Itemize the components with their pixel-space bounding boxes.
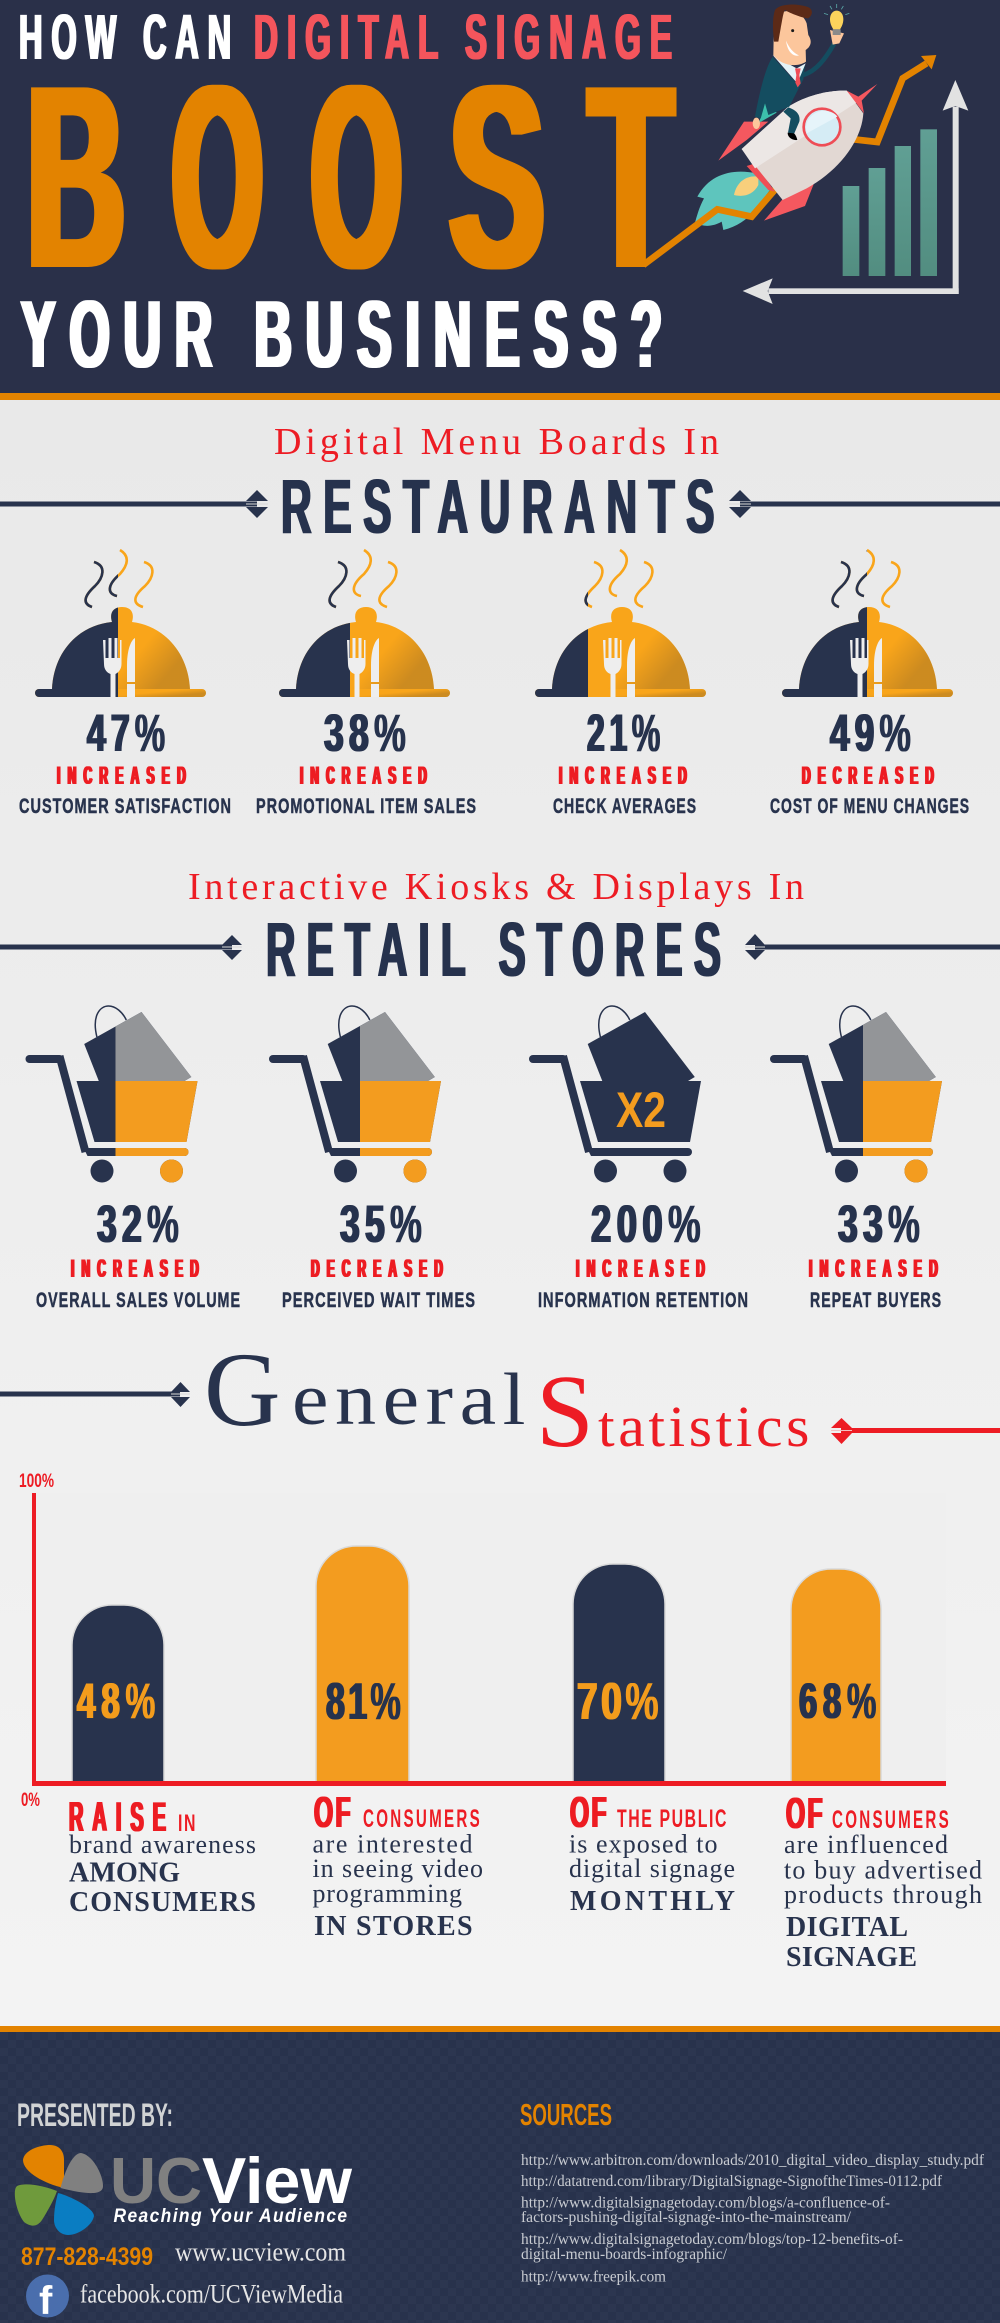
arrow: orange growth line: [643, 55, 936, 265]
heading: general statistics: eneral: [292, 1359, 532, 1441]
phone number: 877-828-4399: [21, 2243, 153, 2271]
icon: shopping cart 33%: [774, 1006, 942, 1182]
title word: boost: T: [589, 32, 673, 323]
icon: cloche 49%: [782, 550, 953, 697]
title word: boost: O: [172, 32, 263, 323]
stat: 21% check averages: INCREASED: [559, 762, 694, 790]
stat: 200% information retention: [533, 1006, 749, 1312]
heading: general statistics: S: [536, 1354, 594, 1469]
bar: 81%: 81%: [326, 1673, 404, 1731]
divider: general right: [831, 1418, 1000, 1444]
stat: 35% perceived wait times: PERCEIVED WAIT TIMES: [282, 1289, 476, 1312]
icon: businessman holding light bulb: [753, 4, 849, 140]
stat: 35% perceived wait times: 35%: [340, 1195, 427, 1254]
stat: 21% check averages: [535, 550, 706, 818]
source list: http://www.arbitron.com/downloads/2010_digital_video_display_study.pdf: [521, 2152, 985, 2169]
logo: ucview: View: [202, 2144, 352, 2217]
caption: of consumers interested in video in stores: IN STORES: [314, 1911, 473, 1942]
caption: raise in brand awareness among consumers: [69, 1793, 256, 1918]
stat: 49% cost of menu changes: [770, 550, 970, 818]
section heading: interactive kiosks and displays in: Interactive Kiosks & Displays In: [188, 866, 804, 908]
stat: 49% cost of menu changes: 49%: [830, 704, 916, 763]
stat: 35% perceived wait times: DECREASED: [311, 1255, 450, 1283]
stat: 32% overall sales volume: OVERALL SALES VOLUME: [36, 1289, 241, 1312]
logo: ucview: Reaching Your Audience: [114, 2206, 348, 2227]
title line: how can digital signage: [19, 1, 681, 73]
caption: raise in brand awareness among consumers: AMONG: [69, 1858, 180, 1888]
stat: 21% check averages: CHECK AVERAGES: [553, 795, 697, 818]
source list: http://www.digitalsignagetoday.com/blogs/a-confluence-of-: [521, 2194, 890, 2211]
divider: general left: [0, 1382, 190, 1407]
icon: cloche 38%: [279, 550, 450, 697]
stat: 200% information retention: INFORMATION RETENTION: [538, 1289, 749, 1312]
caption: of the public exposed monthly: digital signage: [569, 1854, 735, 1883]
divider: retail left: [0, 935, 242, 960]
title word: boost: O: [311, 32, 402, 323]
title word: boost: B: [27, 32, 125, 323]
source list: digital-menu-boards-infographic/: [521, 2246, 728, 2263]
website: www.ucview.com: [175, 2238, 346, 2267]
bar: 70%: [573, 1564, 665, 1782]
stat: 33% repeat buyers: 33%: [838, 1195, 925, 1254]
title word: boost: S: [449, 32, 544, 323]
caption: raise in brand awareness among consumers: IN: [178, 1810, 197, 1837]
bar: 81%: [316, 1546, 409, 1782]
caption: of consumers interested in video in stores: are interested: [312, 1830, 472, 1858]
title word: boost: [27, 32, 673, 323]
icon: cloche 47%: [35, 550, 206, 697]
source list: http://datatrend.com/library/DigitalSignage-SignoftheTimes-0112.pdf: [521, 2173, 943, 2190]
caption: of the public exposed monthly: is exposed to: [569, 1830, 718, 1858]
stat: 21% check averages: 21%: [587, 704, 665, 763]
caption: of consumers influenced by digital signage: SIGNAGE: [786, 1942, 917, 1973]
footer panel: [0, 2026, 1000, 2323]
caption: of consumers influenced by digital signage: are influenced: [784, 1830, 948, 1859]
header panel: [0, 0, 1000, 400]
source list: [521, 2152, 985, 2286]
icon: shopping cart 35%: [273, 1006, 441, 1182]
bar: 48%: [72, 1605, 164, 1782]
divider: restaurants left: [0, 490, 268, 518]
stat: 47% customer satisfaction: INCREASED: [57, 762, 193, 790]
stat: 32% overall sales volume: INCREASED: [71, 1255, 206, 1283]
stat: 200% information retention: INCREASED: [576, 1255, 712, 1283]
icon: rocket: [718, 84, 877, 221]
axis labels: 0%: [21, 1790, 40, 1811]
source list: factors-pushing-digital-signage-into-the-mainstream/: [521, 2209, 852, 2226]
divider: restaurants right: [729, 490, 1000, 518]
heading: presented by: PRESENTED BY:: [17, 2097, 173, 2133]
stat: 47% customer satisfaction: 47%: [87, 704, 170, 763]
heading: general statistics: G: [204, 1331, 281, 1448]
illustration: businessman on rocket over growth chart: [643, 4, 968, 304]
bar: 48%: 48%: [77, 1673, 161, 1729]
caption: of consumers interested in video in stores: [312, 1788, 483, 1942]
caption: of consumers influenced by digital signage: to buy advertised: [784, 1856, 982, 1884]
chart axes: [32, 1493, 946, 1786]
caption: of consumers interested in video in stores: programming: [312, 1879, 462, 1908]
stat: 32% overall sales volume: [30, 1006, 241, 1312]
heading: sources: SOURCES: [520, 2097, 612, 2132]
caption: of the public exposed monthly: OF: [570, 1788, 609, 1837]
icon: shopping cart x2: [533, 1006, 701, 1182]
caption: raise in brand awareness among consumers: CONSUMERS: [69, 1887, 256, 1918]
bar: 68%: 68%: [799, 1673, 882, 1729]
logo: ucview: [15, 2144, 352, 2235]
caption: raise in brand awareness among consumers: brand awareness: [69, 1830, 256, 1859]
caption: of consumers influenced by digital signage: OF: [786, 1789, 825, 1838]
title line: how can digital signage: HOW CAN: [19, 1, 240, 73]
caption: of consumers interested in video in stores: OF: [314, 1788, 353, 1837]
icon: rocket flame: [695, 172, 770, 230]
stat: 33% repeat buyers: [774, 1006, 945, 1312]
stat: 47% customer satisfaction: CUSTOMER SATISFACTION: [19, 795, 232, 818]
icon: cloche 21%: [535, 550, 706, 697]
icon: chart axes arrows: [743, 80, 968, 304]
caption: of consumers interested in video in stores: CONSUMERS: [363, 1805, 482, 1833]
source list: http://www.digitalsignagetoday.com/blogs/top-12-benefits-of-: [521, 2231, 903, 2248]
icon: shopping cart 32%: [30, 1006, 198, 1182]
heading: general statistics: [204, 1331, 813, 1469]
caption: of the public exposed monthly: THE PUBLIC: [617, 1805, 728, 1833]
caption: of consumers influenced by digital signage: products through: [784, 1880, 982, 1909]
stat: 38% promotional item sales: PROMOTIONAL ITEM SALES: [256, 795, 477, 818]
caption: of the public exposed monthly: [569, 1788, 735, 1917]
axis labels: 100%: [19, 1471, 54, 1492]
bar chart: [19, 1471, 946, 1811]
facebook address: facebook.com/UCViewMedia: [80, 2280, 343, 2309]
icon: facebook: f: [39, 2279, 53, 2323]
caption: raise in brand awareness among consumers: RAISE: [69, 1793, 175, 1840]
stat: 200% information retention: 200%: [591, 1195, 706, 1254]
caption: of consumers interested in video in stores: in seeing video: [312, 1854, 483, 1883]
icon: facebook: [26, 2274, 69, 2323]
axis labels: [19, 1471, 54, 1811]
icon: shopping cart x2: X2: [616, 1082, 666, 1138]
divider: retail right: [745, 934, 1000, 960]
heading: general statistics: tatistics: [598, 1394, 813, 1459]
stat: 47% customer satisfaction: [19, 550, 232, 818]
stat: 38% promotional item sales: 38%: [324, 704, 411, 763]
bar: 68%: [791, 1569, 882, 1782]
source list: http://www.freepik.com: [521, 2269, 666, 2286]
caption: of consumers influenced by digital signage: [784, 1789, 982, 1973]
icon: bar chart: [843, 129, 937, 276]
stat: 35% perceived wait times: [273, 1006, 476, 1312]
caption: of consumers influenced by digital signage: DIGITAL: [786, 1912, 908, 1943]
logo: ucview: UC: [110, 2144, 202, 2217]
caption: of the public exposed monthly: MONTHLY: [570, 1886, 735, 1917]
section heading: digital menu boards in: Digital Menu Boards In: [274, 421, 719, 463]
stat: 38% promotional item sales: INCREASED: [300, 762, 434, 790]
bar: 70%: 70%: [577, 1673, 662, 1731]
stat: 38% promotional item sales: [256, 550, 477, 818]
stat: 32% overall sales volume: 32%: [97, 1195, 184, 1254]
